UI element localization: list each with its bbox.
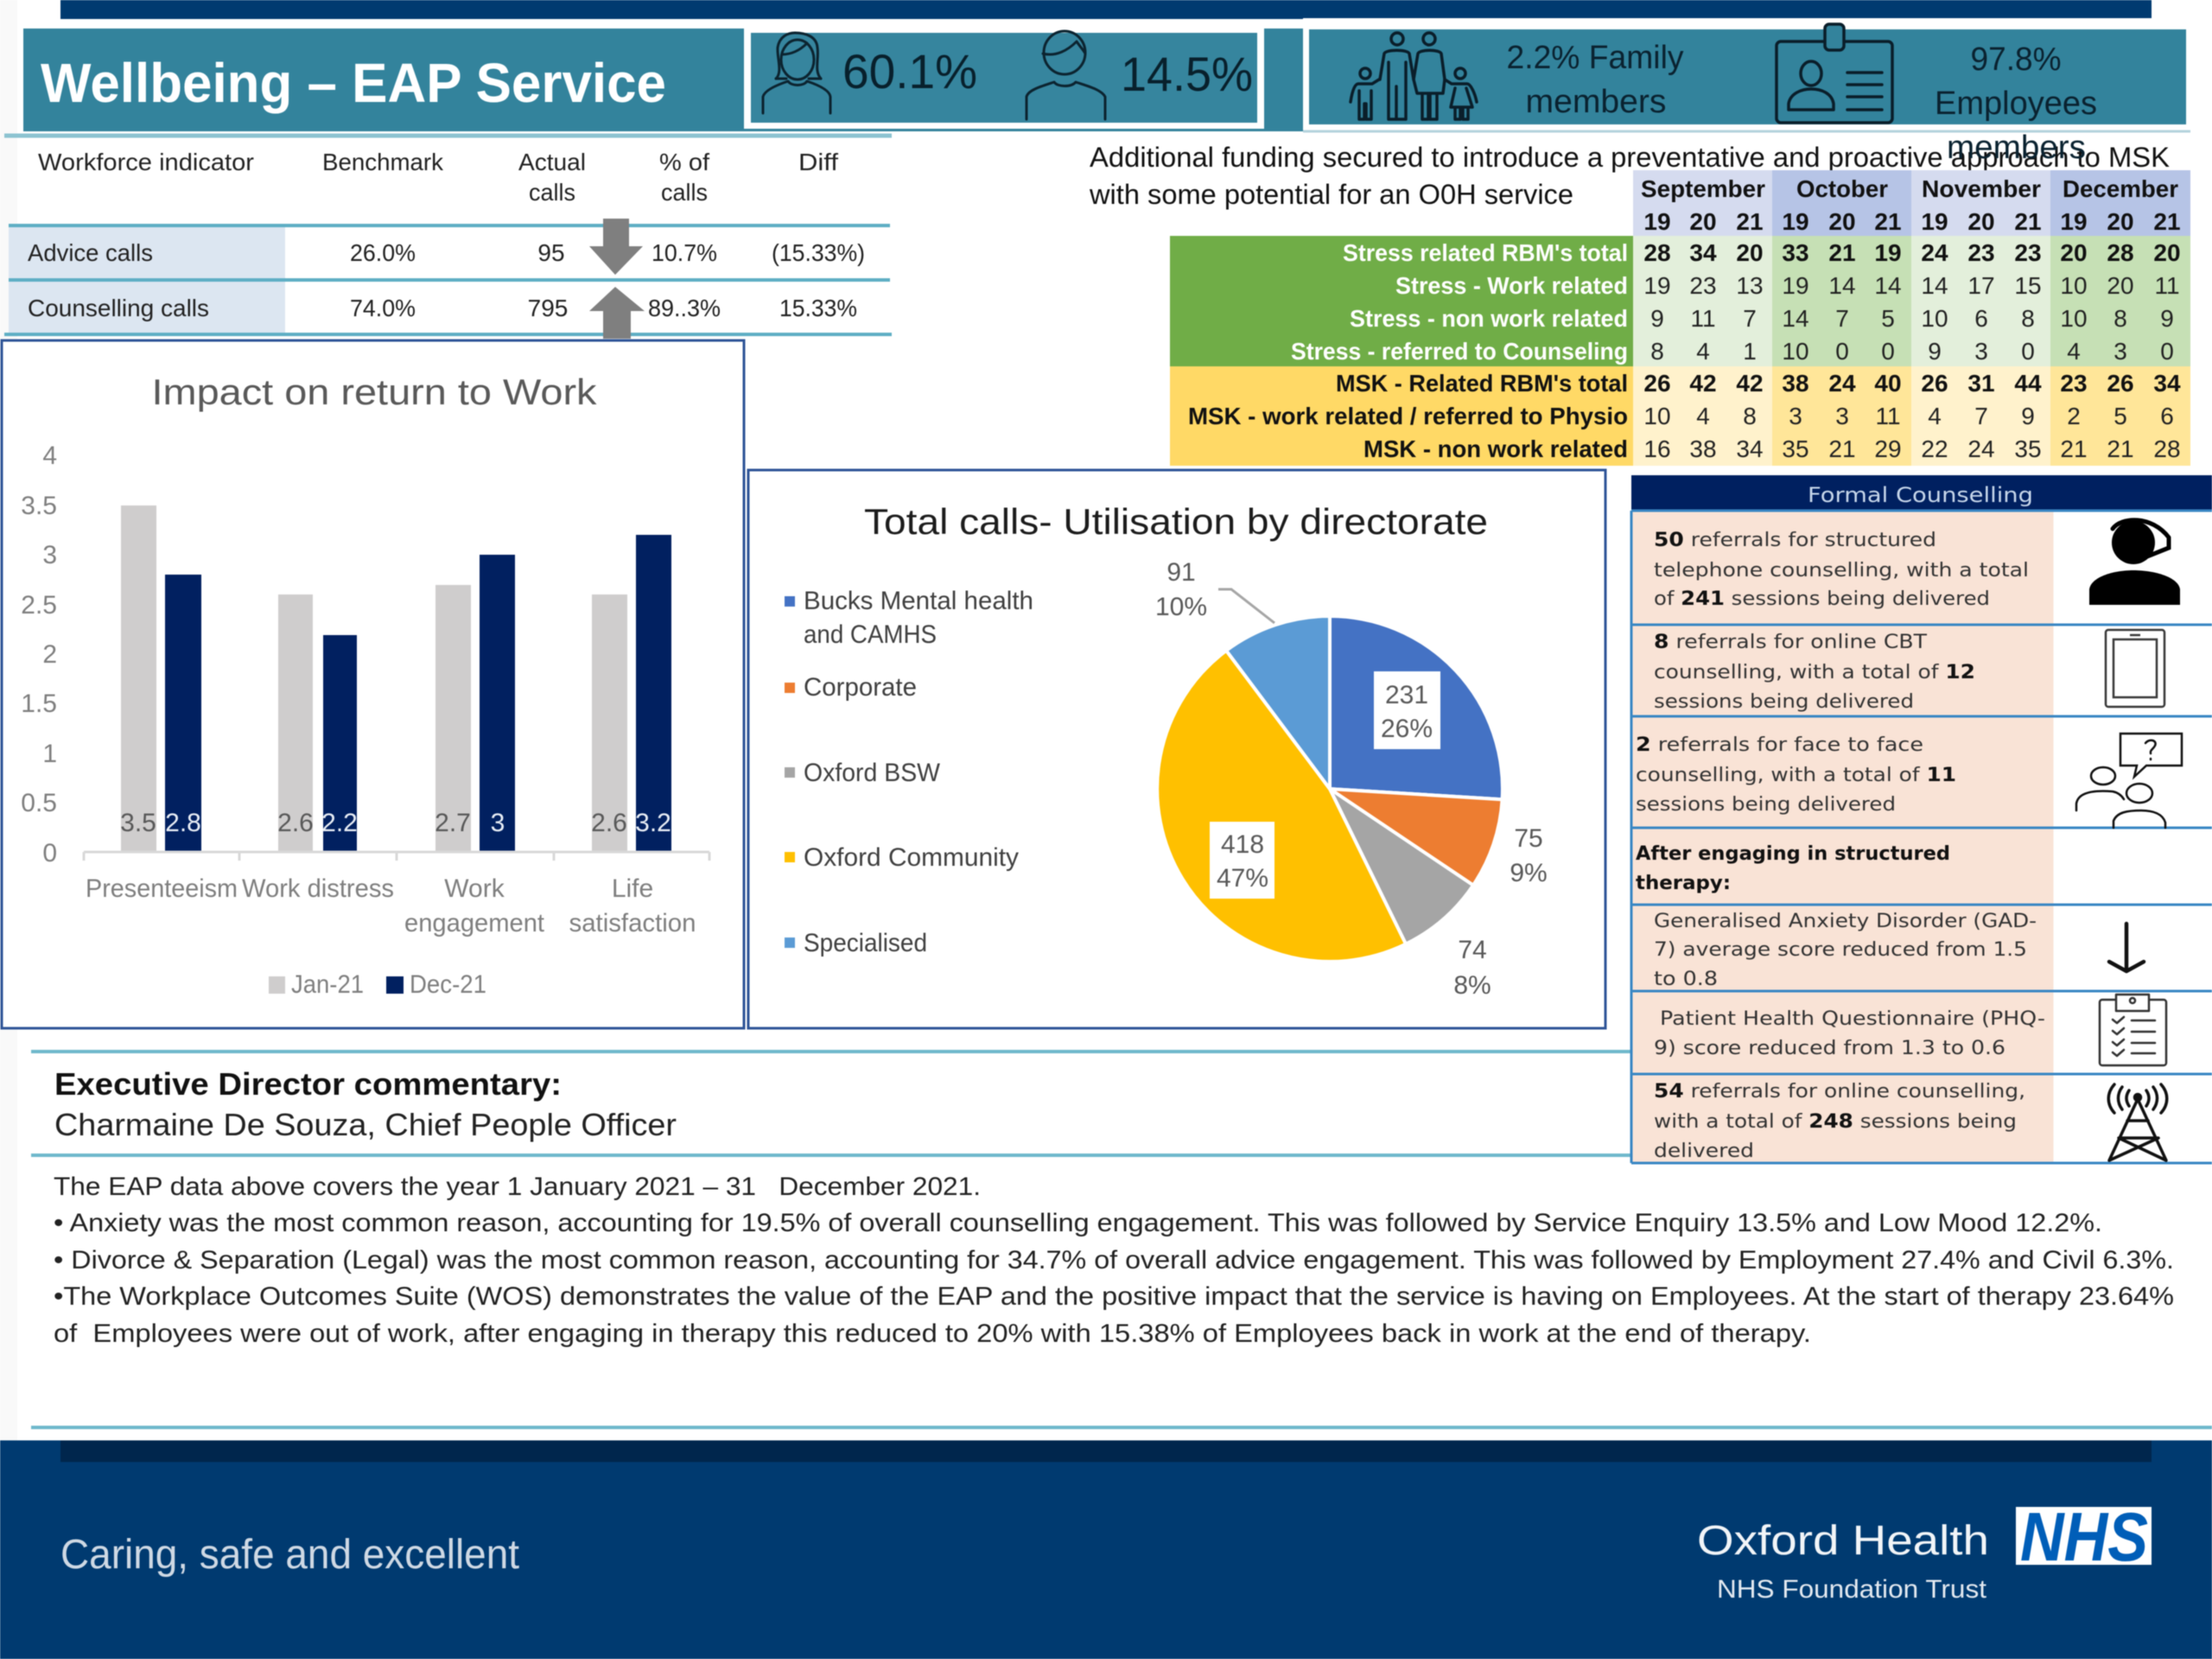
- y axis labels: 3.5: [21, 492, 57, 520]
- row: msk total: 23: [2060, 370, 2088, 397]
- data labels: 2.2: [321, 809, 358, 837]
- table header: Actual: [518, 149, 586, 175]
- row: msk non work related: [1643, 435, 2181, 462]
- pie data labels: 10%: [1155, 593, 1207, 621]
- legend: [785, 587, 1033, 957]
- row: stress work related: 10: [2060, 272, 2088, 299]
- y axis labels: [21, 442, 57, 868]
- row: msk non work related: 16: [1643, 435, 1671, 462]
- year headers: 21: [2153, 208, 2181, 235]
- item: telephone counselling: [1654, 530, 2029, 610]
- row labels: [1188, 239, 1628, 462]
- month headers: [1641, 175, 2178, 202]
- panel header: [1631, 475, 2212, 511]
- icon: conversation: [2076, 734, 2182, 828]
- icon: clipboard: [2100, 995, 2166, 1065]
- table header: Workforce indicator: [38, 149, 254, 175]
- row: stress work related: [1643, 272, 2180, 299]
- data labels: 2.6: [591, 809, 627, 837]
- year headers: [1643, 208, 2181, 235]
- panel: family and employee split: [1303, 18, 2195, 131]
- commentary text: •The Workplace Outcomes Suite (WOS) demonstrates the value of the EAP and the positive impact that the service is having on Employees. At the start of therapy 23.64%: [54, 1282, 2174, 1311]
- y axis labels: 3: [42, 541, 57, 569]
- icon: headset person: [2089, 520, 2180, 605]
- stat: family members: members: [1526, 84, 1666, 120]
- row: stress non work related: 14: [1782, 305, 1809, 332]
- row: stress referred: 4: [1696, 338, 1710, 365]
- item: telephone counselling: of 241 sessions being delivered: [1654, 588, 1990, 610]
- icon: man: [1027, 31, 1105, 119]
- stat: 14.5%: 14.5%: [1121, 47, 1253, 101]
- month headers: November: [1922, 175, 2041, 202]
- month headers: October: [1796, 175, 1888, 202]
- row: stress non work related: 10: [1921, 305, 1948, 332]
- row: stress total: 34: [1689, 239, 1717, 266]
- data labels: 3.2: [635, 809, 671, 837]
- item: PHQ-9: [1654, 1008, 2045, 1059]
- category labels: Presenteeism: [86, 874, 238, 903]
- commentary heading: Executive Director commentary:: [54, 1066, 562, 1102]
- row: stress referred: 0: [1835, 338, 1849, 365]
- item: online counselling: with a total of 248 sessions being: [1654, 1111, 2017, 1133]
- row: counselling calls: Counselling calls: [28, 295, 209, 321]
- legend: Specialised: [804, 929, 927, 957]
- row: msk non work related: 21: [2107, 435, 2134, 462]
- table header: calls: [529, 179, 575, 206]
- table header: [38, 149, 838, 206]
- row: stress referred: 0: [2021, 338, 2035, 365]
- row: msk work related: 4: [1696, 403, 1710, 429]
- row labels: Stress related RBM's total: [1343, 239, 1628, 266]
- item: telephone counselling: telephone counselling, with a total: [1654, 560, 2029, 582]
- pie data labels: 418: [1221, 830, 1264, 859]
- pie data labels: 8%: [1453, 971, 1491, 1000]
- commentary heading: Charmaine De Souza, Chief People Officer: [54, 1107, 677, 1142]
- row: msk work related: 7: [1974, 403, 1988, 429]
- arrow: advice down: [589, 219, 643, 275]
- pie data labels: 26%: [1381, 715, 1433, 743]
- row: stress non work related: 5: [1881, 305, 1895, 332]
- item: PHQ-9: 9) score reduced from 1.3 to 0.6: [1654, 1038, 2005, 1059]
- pie data labels: 231: [1385, 681, 1428, 709]
- row: stress work related: 23: [1689, 272, 1717, 299]
- item: after therapy heading: [1636, 843, 1950, 894]
- row: stress total: 19: [1874, 239, 1902, 266]
- data labels: 3: [491, 809, 505, 837]
- legend: Oxford BSW: [804, 759, 941, 787]
- row: stress referred: 0: [1881, 338, 1895, 365]
- year headers: 20: [1689, 208, 1717, 235]
- row: stress referred: 3: [2113, 338, 2127, 365]
- row: advice calls: 10.7%: [652, 239, 717, 266]
- year headers: 19: [2060, 208, 2088, 235]
- row: msk non work related: 38: [1689, 435, 1717, 462]
- data labels: 2.8: [165, 809, 201, 837]
- item: face to face: 2 referrals for face to face: [1636, 734, 1923, 756]
- pie data labels: 75: [1514, 824, 1543, 853]
- row: counselling calls: [28, 295, 857, 321]
- stat: employees: [1935, 41, 2097, 122]
- row: counselling calls: 15.33%: [779, 295, 857, 321]
- row: msk non work related: 35: [1782, 435, 1809, 462]
- row: msk work related: 2: [2067, 403, 2081, 429]
- row: msk work related: 11: [1875, 403, 1901, 429]
- row: stress referred: 1: [1743, 338, 1757, 365]
- arrow: counselling up: [589, 287, 645, 339]
- row: stress non work related: 7: [1743, 305, 1757, 332]
- strapline: Caring, safe and excellent: [60, 1532, 519, 1578]
- stat: 60.1%: 60.1%: [842, 44, 977, 99]
- commentary text: • Anxiety was the most common reason, accounting for 19.5% of overall counselling engagement. This was followed by Service Enquiry 13.5% and Low Mood 12.2%.: [54, 1209, 2102, 1237]
- row: msk work related: 10: [1643, 403, 1671, 429]
- row: msk total: 42: [1736, 370, 1764, 397]
- row: msk total: 42: [1689, 370, 1717, 397]
- row: msk total: 26: [1921, 370, 1948, 397]
- pie data labels: 74: [1458, 936, 1487, 964]
- row: advice calls: [28, 239, 865, 266]
- row: stress total: 24: [1921, 239, 1948, 266]
- legend: Dec-21: [410, 970, 486, 999]
- stat: employees: 97.8%: [1970, 41, 2062, 78]
- panel: formal counselling: [1631, 475, 2212, 1163]
- row: msk total: 44: [2014, 370, 2042, 397]
- title: Wellbeing – EAP Service: [41, 52, 666, 114]
- column shading: [1170, 170, 2190, 466]
- row: msk work related: 4: [1928, 403, 1942, 429]
- data labels: 3.5: [120, 809, 156, 837]
- bars: [121, 505, 671, 852]
- row: msk non work related: 35: [2014, 435, 2042, 462]
- pie data labels: 91: [1166, 558, 1196, 587]
- item: telephone counselling: 50 referrals for structured: [1654, 530, 1936, 551]
- row: msk non work related: 22: [1921, 435, 1948, 462]
- commentary text: • Divorce & Separation (Legal) was the most common reason, accounting for 34.7% of overall advice engagement. This was followed by Employment 27.4% and Civil 6.3%.: [54, 1246, 2174, 1274]
- year headers: 21: [1874, 208, 1902, 235]
- row: msk total: 24: [1828, 370, 1856, 397]
- row: stress work related: 19: [1643, 272, 1671, 299]
- table: workforce indicators: [4, 136, 892, 339]
- row: stress referred: [1650, 338, 2174, 365]
- item: PHQ-9: Patient Health Questionnaire (PHQ-: [1660, 1008, 2045, 1030]
- row labels: MSK - work related / referred to Physio: [1188, 403, 1628, 429]
- trust name: Oxford Health: [1697, 1518, 1989, 1564]
- row: stress work related: 14: [1921, 272, 1948, 299]
- row: msk work related: [1643, 403, 2174, 429]
- pie: [1157, 616, 1503, 962]
- row: stress total: 28: [1643, 239, 1671, 266]
- category labels: Work distress: [242, 874, 394, 903]
- row: stress non work related: 9: [1650, 305, 1664, 332]
- row: msk total: 26: [1643, 370, 1671, 397]
- icon: tablet: [2106, 630, 2164, 707]
- row: msk non work related: 28: [2153, 435, 2181, 462]
- category labels: engagement: [404, 909, 545, 938]
- chart: total calls by directorate: [748, 470, 1605, 1028]
- row: stress total: [1643, 239, 2181, 266]
- row: stress total: 28: [2107, 239, 2134, 266]
- row: stress work related: 14: [1828, 272, 1856, 299]
- data labels: [120, 809, 671, 837]
- data labels: 2.7: [435, 809, 471, 837]
- y axis labels: 1.5: [21, 690, 57, 718]
- item: GAD-7: to 0.8: [1654, 969, 1718, 990]
- row: stress non work related: 10: [2060, 305, 2088, 332]
- row: stress total: 20: [2153, 239, 2181, 266]
- category labels: Work: [444, 874, 505, 903]
- row: stress non work related: 9: [2160, 305, 2174, 332]
- row: msk non work related: 29: [1874, 435, 1902, 462]
- footer: [0, 1440, 2212, 1659]
- row labels: Stress - Work related: [1395, 272, 1628, 299]
- item: online counselling: 54 referrals for online counselling,: [1654, 1081, 2025, 1103]
- row: msk work related: 5: [2113, 403, 2127, 429]
- legend: [269, 970, 486, 999]
- y axis labels: 2.5: [21, 591, 57, 620]
- row: counselling calls: 89..3%: [648, 295, 721, 321]
- table header: calls: [661, 179, 708, 206]
- row: stress work related: 19: [1782, 272, 1809, 299]
- row: stress work related: 13: [1736, 272, 1764, 299]
- legend: Oxford Community: [804, 843, 1019, 872]
- item: GAD-7: [1654, 911, 2037, 990]
- row: stress non work related: 8: [2021, 305, 2035, 332]
- row: stress non work related: 11: [1690, 305, 1716, 332]
- item: online CBT: sessions being delivered: [1654, 691, 1914, 713]
- text: funding note: with some potential for an O0H service: [1089, 179, 1573, 210]
- panel header: Formal Counselling: [1808, 483, 2033, 507]
- row: stress work related: 20: [2107, 272, 2134, 299]
- month headers: December: [2063, 175, 2178, 202]
- category labels: satisfaction: [569, 909, 696, 938]
- item: online CBT: [1654, 632, 1975, 713]
- table: RBM by month: [1170, 170, 2190, 466]
- year headers: 19: [1643, 208, 1671, 235]
- year headers: 19: [1782, 208, 1809, 235]
- stat: employees: Employees: [1935, 86, 2097, 122]
- row: stress work related: 14: [1874, 272, 1902, 299]
- year headers: 20: [1828, 208, 1856, 235]
- month headers: September: [1641, 175, 1765, 202]
- row: stress total: 21: [1828, 239, 1856, 266]
- row: msk work related: 8: [1743, 403, 1757, 429]
- item: online CBT: counselling, with a total of 12: [1654, 662, 1975, 683]
- icon: signal tower: [2108, 1084, 2167, 1160]
- NHS logo: NHS: [2020, 1498, 2148, 1575]
- item: after therapy heading: After engaging in structured: [1636, 843, 1950, 865]
- panel: gender split: [744, 22, 1303, 131]
- row: stress work related: 15: [2014, 272, 2042, 299]
- chart title: Total calls- Utilisation by directorate: [864, 501, 1488, 542]
- row: advice calls: 26.0%: [350, 239, 416, 266]
- icon: id badge: [1777, 24, 1892, 123]
- row: msk non work related: 21: [1828, 435, 1856, 462]
- row labels: Stress - referred to Counseling: [1291, 338, 1628, 365]
- y axis labels: 1: [42, 740, 57, 768]
- row: stress total: 20: [1736, 239, 1764, 266]
- icon: family: [1351, 33, 1477, 119]
- row: msk work related: 6: [2160, 403, 2174, 429]
- item: face to face: [1636, 734, 1956, 816]
- row: stress work related: 11: [2154, 272, 2180, 299]
- top navy bar: [60, 0, 2152, 19]
- row: msk work related: 3: [1835, 403, 1849, 429]
- row: msk non work related: 24: [1967, 435, 1995, 462]
- year headers: 20: [2107, 208, 2134, 235]
- legend: and CAMHS: [804, 620, 937, 649]
- trust subtitle: NHS Foundation Trust: [1717, 1575, 1987, 1604]
- icon: down arrow: [2109, 924, 2144, 971]
- pie data labels: [1155, 558, 1548, 1000]
- commentary text: The EAP data above covers the year 1 January 2021 – 31 December 2021.: [54, 1173, 981, 1201]
- row: advice calls: (15.33%): [772, 239, 865, 266]
- row labels: MSK - non work related: [1363, 435, 1628, 462]
- row: msk total: 40: [1874, 370, 1902, 397]
- row: stress referred: 10: [1782, 338, 1809, 365]
- row: stress non work related: 7: [1835, 305, 1849, 332]
- item: face to face: sessions being delivered: [1636, 794, 1896, 816]
- year headers: 21: [2014, 208, 2042, 235]
- row: msk total: 34: [2153, 370, 2181, 397]
- commentary text: of Employees were out of work, after engaging in therapy this reduced to 20% with 15.38% of Employees back in work at the end of therapy.: [54, 1319, 1811, 1348]
- row: counselling calls: 795: [528, 295, 568, 321]
- year headers: 21: [1736, 208, 1764, 235]
- legend: Corporate: [804, 673, 917, 702]
- table header: Benchmark: [322, 149, 444, 175]
- row: stress referred: 4: [2067, 338, 2081, 365]
- commentary heading: [31, 1052, 1633, 1155]
- row: msk work related: 3: [1789, 403, 1802, 429]
- chart: impact on return to work: [2, 340, 744, 1028]
- table header: % of: [659, 149, 709, 175]
- stat: family members: 2.2% Family: [1507, 40, 1683, 76]
- item: GAD-7: Generalised Anxiety Disorder (GAD-: [1654, 911, 2037, 932]
- pie data labels: 9%: [1510, 859, 1548, 887]
- category labels: Life: [612, 874, 653, 903]
- category labels: [86, 874, 696, 938]
- commentary text: [54, 1173, 2174, 1348]
- legend: Bucks Mental health: [804, 587, 1033, 615]
- row: stress total: 23: [2014, 239, 2042, 266]
- item: online counselling: [1654, 1081, 2025, 1162]
- item: face to face: counselling, with a total of 11: [1636, 765, 1956, 786]
- row: msk total: 26: [2107, 370, 2134, 397]
- row: stress referred: 8: [1650, 338, 1664, 365]
- row: advice calls: 95: [537, 239, 565, 266]
- y axis labels: 0: [42, 839, 57, 868]
- row: stress referred: 0: [2160, 338, 2174, 365]
- pie data labels: 47%: [1217, 864, 1268, 893]
- row labels: Stress - non work related: [1350, 305, 1628, 332]
- row: msk total: [1643, 370, 2181, 397]
- overflowing label: members: members: [1947, 130, 2086, 166]
- row: msk work related: 9: [2021, 403, 2035, 429]
- row: msk non work related: 21: [2060, 435, 2088, 462]
- row: stress work related: 17: [1967, 272, 1995, 299]
- row: counselling calls: 74.0%: [350, 295, 416, 321]
- text: funding note: [1089, 142, 2170, 210]
- row: msk total: 31: [1967, 370, 1995, 397]
- item: after therapy heading: therapy:: [1636, 873, 1731, 894]
- row: msk total: 38: [1782, 370, 1809, 397]
- year headers: 19: [1921, 208, 1948, 235]
- table header: Diff: [798, 149, 838, 175]
- row: stress total: 23: [1967, 239, 1995, 266]
- y axis labels: 2: [42, 640, 57, 669]
- leader line: [1218, 589, 1274, 623]
- x axis: [84, 852, 709, 861]
- text: funding note: Additional funding secured to introduce a preventative and proactive approach to MSK: [1090, 142, 2170, 173]
- item: GAD-7: 7) average score reduced from 1.5: [1654, 939, 2027, 961]
- year headers: 20: [1967, 208, 1995, 235]
- row: advice calls: Advice calls: [28, 239, 153, 266]
- item: online counselling: delivered: [1654, 1141, 1754, 1162]
- y axis labels: 4: [42, 442, 57, 470]
- row: stress total: 33: [1782, 239, 1809, 266]
- data labels: 2.6: [277, 809, 314, 837]
- chart title: Impact on return to Work: [152, 372, 598, 412]
- row: stress referred: 9: [1928, 338, 1942, 365]
- item: online CBT: 8 referrals for online CBT: [1654, 632, 1928, 653]
- title banner: [23, 29, 744, 131]
- icon: woman: [763, 33, 830, 113]
- y axis labels: 0.5: [21, 789, 57, 817]
- row: stress non work related: 8: [2113, 305, 2127, 332]
- row: stress non work related: [1650, 305, 2174, 332]
- row: msk non work related: 34: [1736, 435, 1764, 462]
- row: stress referred: 3: [1974, 338, 1988, 365]
- stat: family members: [1507, 40, 1683, 120]
- row labels: MSK - Related RBM's total: [1336, 370, 1628, 397]
- row: stress total: 20: [2060, 239, 2088, 266]
- legend: Jan-21: [291, 970, 364, 999]
- row: stress non work related: 6: [1974, 305, 1988, 332]
